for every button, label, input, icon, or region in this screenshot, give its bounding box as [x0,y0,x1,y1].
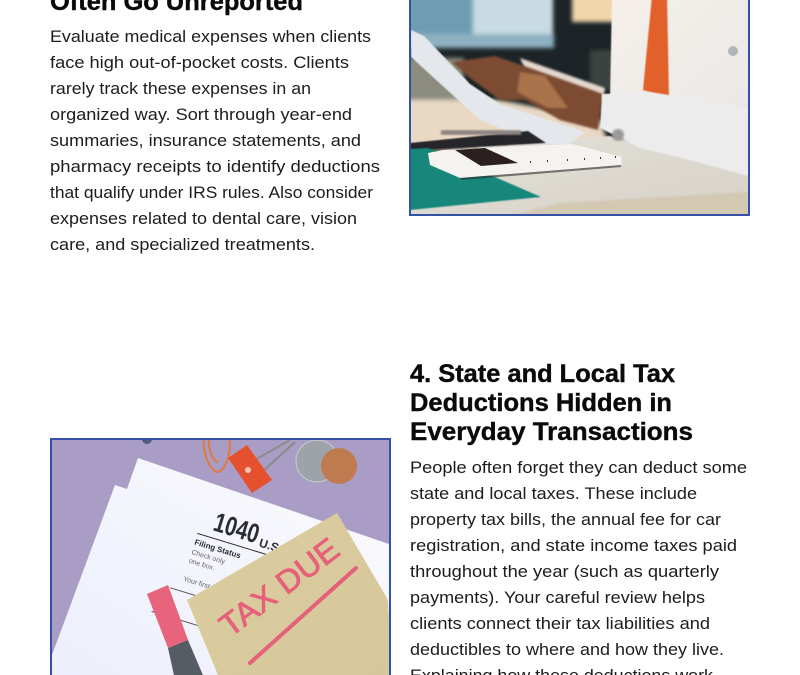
form text: U.S [257,536,281,555]
section 4 heading: Deductions Hidden in [410,389,672,417]
form text: one box. [188,558,216,572]
section 3 body text: that qualify under IRS rules. Also consider [50,183,373,202]
photo: 1040 form with tax due note [50,434,392,675]
section 4 heading [410,360,693,446]
rear sheet [520,58,605,100]
section 3 body text: Evaluate medical expenses when clients [50,27,371,46]
form text: Filing Status [193,538,242,560]
section 4 body text [410,458,747,675]
section 3 body text: expenses related to dental care, vision [50,209,357,228]
clip wires [255,440,295,472]
form text [151,514,279,626]
shirt [609,0,748,108]
section 4 body text: deductibles to where and how they live. [410,640,724,659]
hand [452,56,603,130]
papers [52,458,392,675]
button [728,46,738,56]
binder clip [228,445,272,493]
section 3 body text: pharmacy receipts to identify deductions [50,157,380,176]
paperclip [204,438,230,472]
paper [411,30,585,144]
section 3 body text: face high out-of-pocket costs. Clients [50,53,349,72]
coins [296,440,338,482]
section 4 body text: state and local taxes. These include [410,484,697,503]
form text: 1040 [210,507,263,549]
sleeve [600,92,752,177]
notebook [410,131,546,150]
section 3 body text: summaries, insurance statements, and [50,131,361,150]
form text: Your first [182,576,211,591]
section 3 body text: care, and specialized treatments. [50,235,315,254]
section 4 body text: registration, and state income taxes paid [410,536,737,555]
section 4 heading: 4. State and Local Tax [410,360,675,388]
marker [147,585,188,648]
mat [410,148,541,210]
section 4 body text: People often forget they can deduct some [410,458,747,477]
section 3 body text: rarely track these expenses in an [50,79,311,98]
desk [411,135,748,214]
tax due note [187,513,392,675]
calculator [428,144,622,178]
section 4 heading: Everyday Transactions [410,418,693,446]
section 3 body text: organized way. Sort through year-end [50,105,352,124]
photo: 1040 form with tax due note: TAX DUE [213,531,346,644]
section 4 body text: property tax bills, the annual fee for car [410,510,721,529]
section 4 body text: clients connect their tax liabilities and [410,614,710,633]
section 4 body text: throughout the year (such as quarterly [410,562,720,581]
section 4 body text: payments). Your careful review helps [410,588,705,607]
section 3 body text [50,27,380,254]
form text: Check only [191,549,226,566]
photo: hands reviewing a paper over a calculator [404,0,755,222]
tie [643,0,669,98]
